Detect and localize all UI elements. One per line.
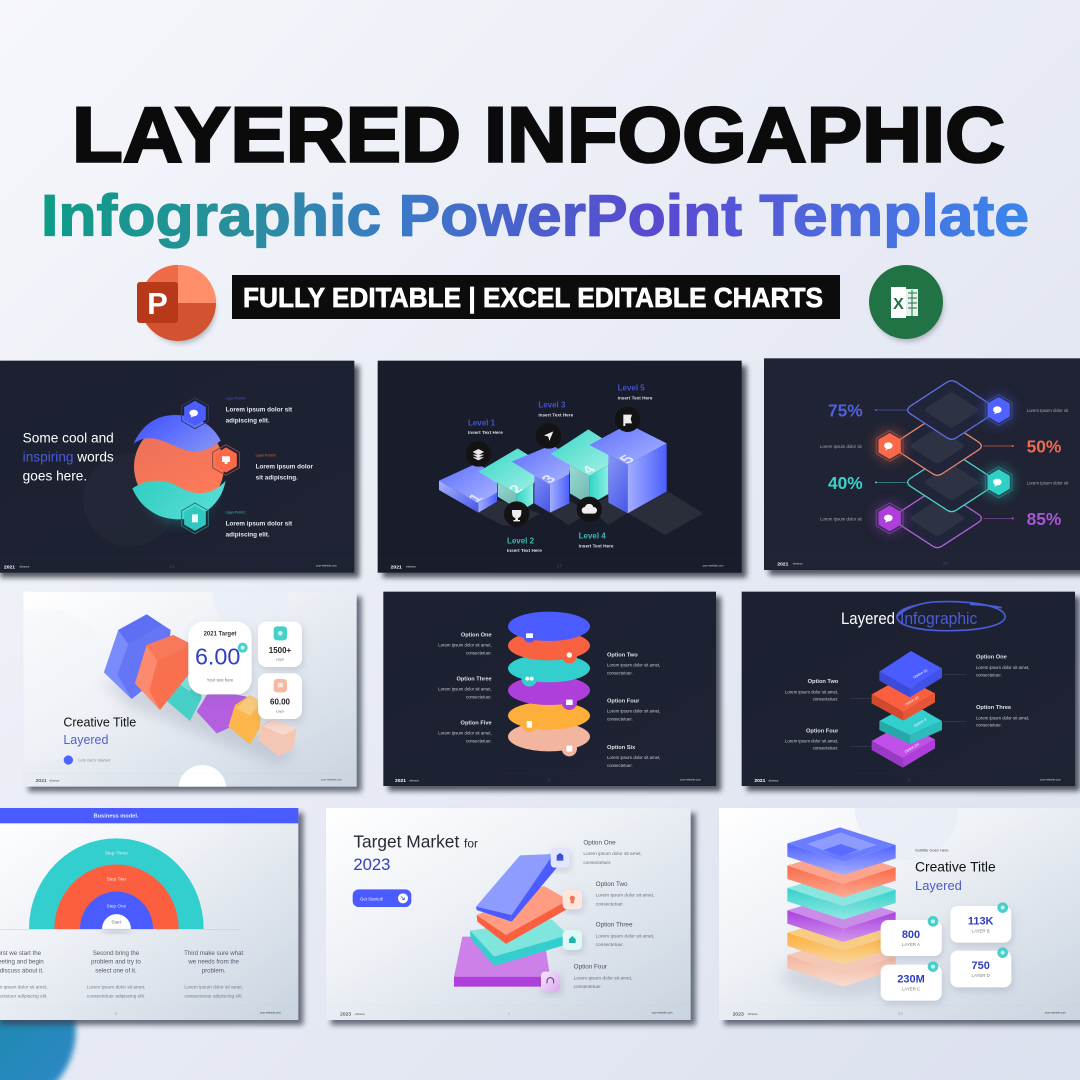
text: second column: select one of it. [95,967,137,974]
footer: vibrance [355,1012,366,1016]
chart: semicircle layers: Step Two [107,877,126,882]
icon: point C hexagon [182,503,208,534]
text: option two: consectetuer. [607,670,633,675]
text: option one: Lorem ipsum dolor sit amet, [438,643,492,648]
chart: layered sphere [132,415,226,522]
slab: blue [879,651,942,697]
label: level 3 [538,401,574,418]
footer: 2021 [754,778,766,784]
button: get started [353,889,411,907]
text: option two [596,881,654,907]
footer: 2023 [733,1012,744,1018]
chart: blue slab [476,854,558,922]
footer: 11 [169,564,175,570]
chart: semicircle layers: Step One [106,903,127,908]
text: option four [607,699,660,721]
chart: cube 4 [551,429,610,505]
text: option one: Lorem ipsum dolor sit amet, [583,851,642,857]
slab: teal: Option 3 [913,718,927,728]
footer: your-website.com [316,564,338,568]
text: option six: consectetuer. [607,763,633,768]
call to action: Lets Get's Started [78,757,110,762]
text: option one: consectetuer. [583,860,612,866]
icon: flag [615,407,640,432]
text: option four [785,728,839,751]
card: 750 layer D: LAYER D [972,973,990,978]
panel: slide sphere [0,361,359,578]
icon: layers [466,441,491,467]
label: level 4: Insert Text Here [579,543,614,548]
chart: teal slab [470,919,568,966]
heading: layered infographic: Infographic [900,609,977,628]
layer: yellow [787,917,896,964]
text: point A: Layer Point A [226,397,246,401]
icon: purple hexagon [876,503,904,534]
slab: purple [872,723,935,768]
card: 800 layer A [881,916,942,956]
card: 750 layer D: 750 [971,960,990,972]
chart: cube 2: 2 [505,483,527,496]
text: option one: Option One [461,633,492,639]
label: level 1: Insert Text Here [468,430,503,435]
card: 113K layer B: LAYER B [972,928,990,933]
text: first column [0,950,48,999]
text: option three: consectetuer. [466,694,492,699]
icon: trophy [504,501,529,527]
icon: cloud [577,497,602,522]
card: 2021 target: Your text here [207,677,234,682]
footer: 2023 [340,1012,351,1018]
text: third column [184,950,244,999]
icon: point B hexagon [213,445,239,475]
captions: Lorem Ipsum dolor sit [820,517,862,522]
connector lines [875,409,1014,519]
text: option one: Lorem ipsum dolor sit amet, [976,665,1029,670]
text: third column: Third make sure what [184,950,244,957]
text: option one: Option One [976,654,1007,660]
text: second column [87,950,145,999]
text: option six [607,745,660,768]
text: option four: Option Four [806,728,839,734]
layer: teal [787,872,896,920]
icon: mail card [551,848,569,868]
heading: creative title: Layered [915,878,962,893]
footer: 3 [908,778,911,783]
card: 60.00: 60.00 [270,698,291,707]
footer: your-website.com [260,1011,282,1015]
chart: hexagon prisms [104,614,297,757]
card: 800 layer A: 800 [902,929,920,941]
banner: fully editable: FULLY EDITABLE | EXCEL EDITABLE CHARTS [243,282,823,313]
chart: cube 3 [512,445,572,513]
stat: 40 percent: 40% [828,473,863,493]
icon: PowerPoint logo [137,265,216,343]
main title: LAYERED INFOGAPHIC [72,90,1005,178]
panel: slide hexagon prisms [24,592,366,796]
text: option two [607,652,660,675]
heading: inspiring words: inspiring words [23,449,114,464]
footer: vibrance [409,779,420,783]
card: 800 layer A: LAYER A [902,942,920,947]
stat: 50 percent: 50% [1027,437,1061,457]
text: option one: consectetuer. [976,672,1002,677]
footer [742,773,1075,784]
footer [764,555,1080,567]
connector lines [850,674,967,747]
text: option two: Lorem ipsum dolor sit amet, [785,689,838,694]
footer: your-website.com [1040,778,1062,782]
text: option five: consectetuer. [466,738,492,743]
text: second column: problem and try to [91,959,141,966]
text: option three: Lorem ipsum dolor sit amet, [438,686,492,691]
layer: teal [508,654,590,687]
card: 230M layer C [881,961,942,1001]
text: option three [438,677,492,699]
text: option four: consectetuer. [813,746,838,751]
layer: yellow [508,702,590,732]
label: level 5: Insert Text Here [618,395,653,400]
card: 60.00 [258,673,302,719]
text: option one [976,654,1029,677]
heading: inspiring words [23,430,114,483]
text: option two: Option Two [607,652,638,658]
text: option three [596,922,654,948]
footer [0,558,354,570]
captions [820,408,1069,522]
heading: layered infographic: Layered [841,609,895,628]
icon: orange hexagon [876,431,904,461]
text: option four: Option Four [574,964,607,971]
icon: award card [563,890,582,909]
footer: vibrance [406,565,417,569]
chart: orange slab [477,886,568,944]
layer: peach [508,722,590,756]
footer: 5 [115,1011,118,1017]
footer: your-website.com [680,778,702,782]
text: option four: Lorem ipsum dolor sit amet, [574,975,632,981]
captions: Lorem Ipsum dolor sit [1027,480,1069,485]
layer: purple [508,676,590,710]
footer [383,773,716,784]
slab: blue: Option 01 [913,668,928,679]
stat: 85 percent: 85% [1027,509,1061,529]
text: option two: Option Two [596,881,628,888]
text: third column: consectetuer adipiscing elit. [184,993,243,999]
text: option two: Lorem ipsum dolor sit amet, [607,662,660,667]
layer: blue top [787,827,896,875]
heading: creative title: Creative Title [915,858,996,874]
text: option three: Lorem ipsum dolor sit amet, [596,933,654,939]
text: option three [976,705,1029,728]
slab: purple: Option 04 [904,742,920,754]
card: 2021 target: 6.00 [195,643,240,669]
footer: vibrance [748,1012,758,1016]
chart: purple slab [454,937,550,987]
panel: slide isometric slabs [742,592,1080,791]
label: level 5 [618,384,653,400]
text: point B: sit adipiscing. [256,474,298,481]
text: option two: Option Two [808,679,839,685]
label: level 2 [507,536,542,553]
captions: Lorem Ipsum dolor sit [1027,408,1069,413]
text: third column: Lorem ipsum dolor sit amet, [184,984,243,990]
footer: your-website.com [1045,1011,1067,1015]
text: option three: Option Three [456,677,492,683]
label: level 5: Level 5 [618,384,645,393]
card: 1500+: Layer [276,658,285,662]
text: option six: Option Six [607,745,636,751]
text: third column: we needs from the [187,959,240,966]
panel: slide percent diamonds [764,358,1080,575]
card: 113K layer B [950,902,1011,943]
footer: 2021 [36,778,47,784]
card: 113K layer B: 113K [968,915,994,927]
label: level 1 [468,418,503,435]
chart: cube 1 [439,463,497,513]
banner: fully editable [232,275,840,319]
footer: 15 [898,1011,903,1017]
chart: cube 5: 5 [616,453,639,466]
chart: cube 2 [478,448,542,513]
footer: 2021 [395,778,406,784]
text: point B [256,454,314,481]
icon: teal hexagon [985,467,1013,498]
text: point B: Lorem ipsum dolor [256,463,314,470]
card: 230M layer C: 230M [897,974,925,986]
heading: creative title: Creative Title [63,716,136,730]
chart: cube 1: 1 [465,492,487,505]
footer: your-website.com [652,1011,673,1015]
text: option three: Option Three [976,705,1011,711]
footer: vibrance [768,779,779,783]
heading: target market [353,831,478,874]
text: option four: Lorem ipsum dolor sit amet, [785,738,838,743]
chart: cube 3: 3 [538,473,560,486]
text: third column: problem. [202,967,226,974]
icon: home card [563,930,582,950]
heading: creative title: Layered [63,733,109,747]
icon: blue hexagon [985,395,1013,425]
text: point C: Lorem ipsum dolor sit [226,520,293,527]
text: point C: Layer Point C [226,511,246,515]
call to action [64,755,110,765]
panel: slide layer stack [719,808,1080,1029]
text: option one [438,633,492,656]
footer: vibrance [19,565,30,569]
text: second column: consectetuer adipiscing elit. [87,993,145,999]
label: level 4: Level 4 [579,532,606,541]
card: 60.00: Layer [276,709,285,713]
footer: vibrance [49,778,60,782]
text: option four: consectetuer. [607,716,633,721]
text: point A: adipiscing elit. [226,417,270,424]
text: option five [438,721,492,743]
footer: 1 [508,1011,511,1016]
text: option five: Option Five [461,721,492,727]
footer [23,773,357,784]
footer [326,1005,691,1018]
text: option five: Lorem ipsum dolor sit amet, [438,730,492,735]
card: 750 layer D [950,947,1011,987]
layer: blue [508,612,590,643]
text: option six: Lorem ipsum dolor sit amet, [607,755,660,760]
chart: cube 4: 4 [578,463,601,476]
card: 2021 target: 2021 Target [204,632,236,638]
label: level 4 [579,532,614,548]
text: point C [226,511,293,538]
subtitle: Infographic PowerPoint Template [41,184,1029,248]
icon: Excel logo [869,265,943,341]
label: level 2: Level 2 [507,536,535,545]
heading: inspiring words: Some cool and [23,430,114,445]
text: option two: consectetuer. [596,901,624,907]
diamond: purple layer [893,489,981,548]
text: point C: adipiscing elit. [226,531,270,538]
layer: purple [787,894,896,942]
chart: semicircle layers: Start [111,919,122,924]
heading: layered infographic [841,602,1005,631]
text: option two [785,679,839,702]
footer: your-website.com [703,564,724,568]
diamond: teal layer [908,453,996,512]
heading: target market: Target Market [353,831,459,851]
footer: 6 [548,778,551,783]
text: option one: Option One [583,840,616,847]
icon: paper plane [536,423,561,449]
label: level 3: Level 3 [538,401,566,410]
footer [378,558,742,570]
text: option four [574,964,632,990]
diamond: orange layer [893,417,981,475]
header bar [0,808,298,823]
text: option four: consectetuer. [574,984,602,990]
heading: creative title [915,848,996,893]
text: point B: Layer Point B [256,454,276,458]
text: option two: Lorem ipsum dolor sit amet, [596,893,654,899]
card: 1500+ [258,622,302,667]
icon: headset card [541,972,560,992]
label: level 3: Insert Text Here [538,413,574,418]
layer: peach [787,939,896,987]
text: option two: consectetuer. [813,697,838,702]
slab: teal [879,703,942,744]
text: option four: Option Four [607,699,640,705]
chart: semicircle layers: Step Three [105,850,128,855]
icon: Excel logo: X [893,296,904,313]
footer: 17 [557,564,562,570]
label: level 2: Insert Text Here [507,548,542,553]
text: second column: Second bring the [93,950,140,957]
text: option three: Option Three [596,922,633,929]
captions: Lorem Ipsum dolor sit [820,444,862,449]
text: point A: Lorem ipsum dolor sit [226,406,293,413]
icon: PowerPoint logo: P [147,286,168,321]
footer: 2021 [4,564,15,570]
text: second column: Lorem ipsum dolor sit amet, [87,984,145,990]
decorative blob bottom left [0,950,76,1080]
text: option three: consectetuer. [596,942,624,948]
footer: your-website.com [321,778,343,782]
heading: creative title [63,716,136,747]
footer [0,1005,298,1017]
footer: vibrance [793,562,803,566]
heading: target market: 2023 [353,855,390,874]
footer: 2021 [391,564,402,570]
layer: orange [508,631,590,663]
diamond: blue layer [908,381,996,439]
text: option one: consectetuer. [466,651,492,656]
footer: 10 [943,561,948,567]
header bar: Business model. [94,814,139,820]
text: option four: Lorem ipsum dolor sit amet, [607,709,660,714]
footer [719,1005,1080,1018]
layer: orange [787,850,896,897]
panel: slide business model [0,808,303,1025]
button: get started: Get Started! [360,897,383,902]
text: option three: consectetuer. [976,723,1002,728]
stat: 75 percent: 75% [828,401,863,421]
text: point A [226,397,293,424]
card: 1500+: 1500+ [269,646,292,655]
heading: inspiring words: goes here. [23,468,87,483]
label: level 1: Level 1 [468,418,496,427]
panel: slide target market [326,808,696,1025]
heading: creative title: Subtitle Goes Here [915,848,949,853]
card: 230M layer C: LAYER C [902,987,920,992]
slab: orange: Option 02 [904,695,920,707]
text: option three: Lorem ipsum dolor sit amet, [976,715,1029,720]
text: option one [583,840,642,866]
panel: slide stacked ellipses [383,592,721,791]
card: 2021 target [188,622,252,694]
chart: semicircle layers [0,838,240,934]
heading: target market: for [464,836,478,850]
chart: cube 5 [589,424,667,513]
icon: point A hexagon [182,398,208,429]
footer: 2021 [777,561,789,567]
slab: orange [872,677,935,721]
panel: slide isometric levels [378,361,747,578]
floor shadows [478,492,703,535]
